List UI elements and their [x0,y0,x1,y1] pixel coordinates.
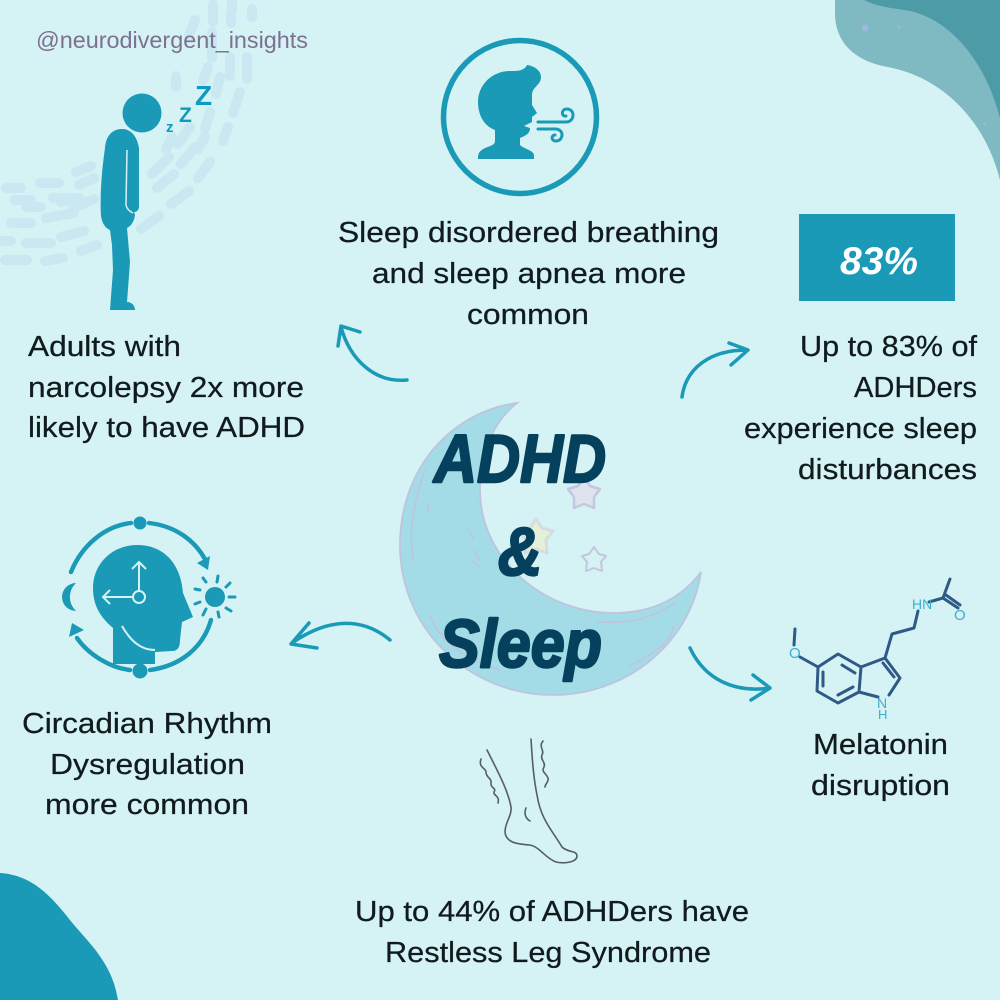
text: restless leg: Up to 44% of ADHDers have [355,896,749,928]
text: narcolepsy: narcolepsy 2x more [28,372,304,404]
icon: melatonin molecule: HN [912,596,932,612]
text: sleep disturbances: ADHDers [854,372,977,404]
icon: melatonin molecule: H [878,707,887,722]
text: sleep disturbances [744,331,978,486]
icon: sleeping person: Z [179,104,192,127]
text: sleep disturbances: experience sleep [744,413,977,445]
text: sleep disturbances: Up to 83% of [800,331,978,363]
text: restless leg [355,896,749,969]
text: melatonin: disruption [811,770,950,802]
text: melatonin: Melatonin [813,729,948,761]
text: sleep apnea [338,217,719,331]
icon: sleeping person: Z [195,80,212,111]
arrow: to melatonin [690,648,770,700]
icon: melatonin molecule: O [789,645,801,662]
arrow: to 83% [682,343,748,397]
arrow: to circadian [291,623,390,648]
text: narcolepsy [28,331,305,444]
handle text: @neurodivergent_insights [36,27,308,53]
icon: melatonin molecule: O [954,607,966,624]
text: circadian: Dysregulation [50,749,245,781]
icon: circadian rhythm head [62,516,235,678]
stat box: 83%: 83% [840,240,918,283]
text: sleep disturbances: disturbances [798,454,977,486]
title: ADHD & Sleep [432,421,606,682]
icon: melatonin molecule [789,579,966,722]
text: narcolepsy: likely to have ADHD [28,412,305,444]
corner blob: top right [835,0,1000,180]
icon: melatonin molecule: N [877,695,887,711]
text: sleep apnea: common [467,299,589,331]
text: sleep apnea: Sleep disordered breathing [338,217,719,249]
corner blob: bottom left [0,873,118,1000]
icon: sleeping person [101,80,212,310]
text: circadian: more common [45,789,249,821]
title: ADHD & Sleep: Sleep [439,606,602,682]
title: ADHD & Sleep: ADHD [432,421,606,497]
text: narcolepsy: Adults with [28,331,181,363]
icon: sleeping person: z [166,119,174,136]
text: circadian: Circadian Rhythm [22,708,272,740]
text: restless leg: Restless Leg Syndrome [385,937,711,969]
arrow: to sleep apnea [338,326,407,380]
title: ADHD & Sleep: & [498,514,542,590]
icon: restless leg [480,739,577,863]
stat box: 83% [799,214,955,301]
text: circadian [22,708,272,821]
icon: crescent moon with stars [400,403,701,695]
text: sleep apnea: and sleep apnea more [372,258,686,290]
icon: breathing head [444,40,596,194]
background swirl pattern [1,2,252,261]
text: melatonin [811,729,950,802]
